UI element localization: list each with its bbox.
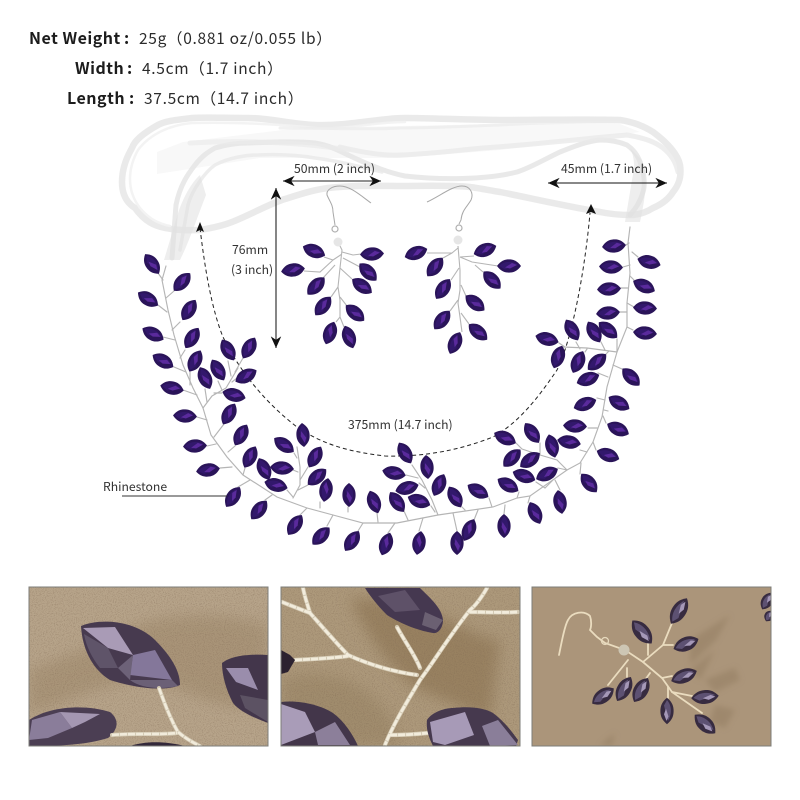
photo gems [588, 590, 777, 739]
dimension: necklace width 45mm [548, 159, 667, 183]
photo frame 2 [281, 587, 520, 746]
dimension: earring width 50mm: 50mm (2 inch) [294, 159, 375, 177]
guide arrowhead right [586, 204, 596, 214]
guide arrowhead left [196, 222, 204, 232]
photo panel: large rhinestone close-up [29, 587, 268, 746]
photo panel: earring on sand [532, 587, 777, 746]
left earring [280, 186, 384, 351]
spec line: width: 4.5cm（1.7 inch） [142, 57, 283, 79]
spec line: net weight: Net Weight [29, 25, 121, 49]
right earring [402, 186, 521, 357]
photo frame 3 [532, 587, 771, 746]
dimension: necklace length 375mm: 375mm (14.7 inch) [348, 415, 453, 433]
necklace rhinestones left strand [134, 250, 275, 523]
photo panel: twisted wire close-up [281, 587, 520, 746]
twisted silver wires [158, 227, 638, 533]
callout: rhinestone [103, 477, 227, 496]
spec line: length: Length [67, 85, 125, 109]
spec line: width: Width [75, 55, 124, 79]
dashed circumference guide [200, 213, 590, 456]
spec line: length: : [129, 85, 135, 109]
dimension: earring height 76mm: (3 inch) [231, 260, 273, 278]
spec line: net weight: : [124, 25, 130, 49]
photo frame 1 [29, 587, 268, 746]
dimension: necklace width 45mm: 45mm (1.7 inch) [561, 159, 652, 177]
spec line: width: : [127, 55, 133, 79]
dimension: earring width 50mm [283, 159, 381, 181]
earring wires [559, 613, 702, 713]
dimension: earring height 76mm: 76mm [232, 240, 268, 258]
callout: rhinestone: Rhinestone [103, 477, 167, 495]
necklace rhinestones right strand [491, 238, 662, 515]
necklace rhinestones center [263, 422, 546, 558]
spec line: length: 37.5cm（14.7 inch） [144, 87, 304, 109]
spec line: width [75, 55, 283, 79]
spec line: length [67, 85, 304, 109]
spec line: net weight [29, 25, 332, 49]
spec line: net weight: 25g（0.881 oz/0.055 lb） [139, 27, 332, 49]
dimension: earring height 76mm [231, 188, 276, 348]
organza ribbon ties [122, 118, 681, 260]
